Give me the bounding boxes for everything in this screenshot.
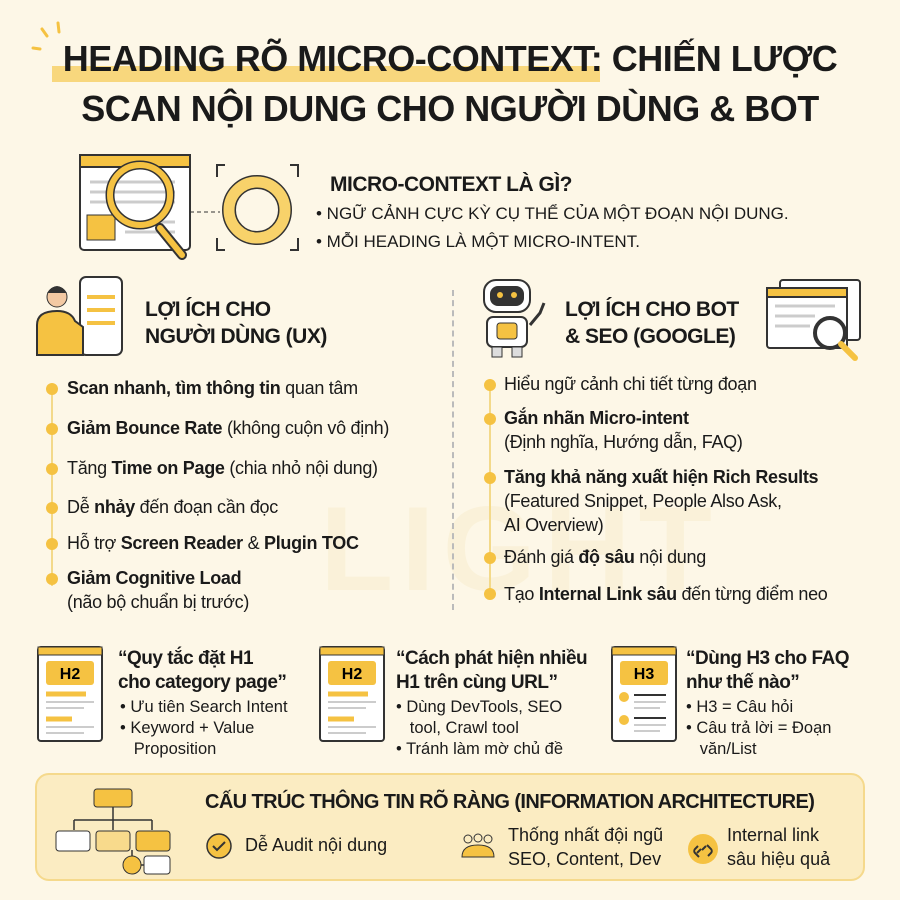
item: internal link: sâu hiệu quả (727, 849, 830, 869)
card: multiple H1: • Dùng DevTools, SEO (396, 698, 562, 716)
icon: browser magnifier (766, 279, 861, 361)
icon: H3 doc: H3 (634, 666, 654, 683)
section: micro-context: • MỖI HEADING LÀ MỘT MICRO-INTENT. (316, 232, 640, 251)
list: UX benefits: Tăng Time on Page (chia nhỏ nội dung) (67, 458, 378, 478)
section: micro-context: • NGỮ CẢNH CỰC KỲ CỤ THỂ CỦA MỘT ĐOẠN NỘI DUNG. (316, 204, 789, 223)
list: UX benefits: (não bộ chuẩn bị trước) (67, 592, 249, 612)
list: bot benefits: (Featured Snippet, People Also Ask, (504, 491, 782, 511)
list: UX benefits: Scan nhanh, tìm thông tin quan tâm (67, 378, 358, 398)
list: UX benefits: Giảm Cognitive Load (67, 568, 241, 588)
heading: bot: & SEO (GOOGLE) (565, 325, 735, 348)
icon: magnifier browser (79, 154, 299, 260)
title: HEADING RÕ MICRO-CONTEXT: CHIẾN LƯỢC (63, 38, 837, 79)
watermark: LIGHT (320, 482, 720, 616)
card: multiple H1: “Cách phát hiện nhiều (396, 648, 587, 669)
list: bot benefits: Gắn nhãn Micro-intent (504, 408, 689, 428)
icon: H2 doc (37, 646, 103, 742)
card: H1 category: Proposition (134, 740, 216, 758)
icon: sparkle (32, 22, 60, 50)
list: bot benefits: Hiểu ngữ cảnh chi tiết từng đoạn (504, 374, 757, 394)
card: H1 category (37, 646, 288, 758)
icon: person with phone (36, 276, 123, 356)
card: H3 FAQ: văn/List (700, 740, 757, 758)
heading: UX (145, 297, 327, 348)
card: H1 category: cho category page” (118, 672, 286, 693)
list: UX benefits: Dễ nhảy đến đoạn cần đọc (67, 497, 278, 517)
card: multiple H1: tool, Crawl tool (410, 719, 519, 737)
item: internal link: Internal link (727, 825, 819, 845)
card: H1 category: “Quy tắc đặt H1 (118, 648, 253, 669)
item: audit: Dễ Audit nội dung (245, 835, 387, 855)
title (52, 38, 837, 129)
panel: information architecture (35, 773, 865, 881)
item: internal link (688, 825, 830, 869)
list: UX benefits (46, 378, 389, 612)
item: team: Thống nhất đội ngũ (508, 825, 663, 845)
card: H3 FAQ: như thế nào” (686, 672, 799, 693)
icon: H3 doc (611, 646, 677, 742)
list: bot benefits: Tạo Internal Link sâu đến từng điểm neo (504, 584, 828, 604)
item: team: SEO, Content, Dev (508, 849, 661, 869)
list: bot benefits: Đánh giá độ sâu nội dung (504, 547, 706, 567)
card: H3 FAQ: • H3 = Câu hỏi (686, 698, 793, 716)
card: multiple H1: • Tránh làm mờ chủ đề (396, 740, 563, 758)
list: bot benefits: AI Overview) (504, 515, 603, 535)
list: UX benefits: Giảm Bounce Rate (không cuộn vô định) (67, 418, 389, 438)
list: UX benefits: Hỗ trợ Screen Reader & Plugin TOC (67, 533, 359, 553)
title: SCAN NỘI DUNG CHO NGƯỜI DÙNG & BOT (81, 88, 819, 129)
icon: robot (483, 279, 546, 358)
icon: H2 doc: H2 (60, 666, 80, 683)
heading: bot (565, 297, 739, 348)
icon: H2 doc (319, 646, 385, 742)
card: multiple H1 (319, 646, 587, 758)
card: H3 FAQ: “Dùng H3 cho FAQ (686, 648, 849, 669)
item: team (462, 825, 663, 869)
card: H3 FAQ: • Câu trả lời = Đoạn (686, 719, 831, 737)
list: bot benefits (484, 374, 828, 604)
card: multiple H1: H1 trên cùng URL” (396, 672, 557, 693)
icon: sitemap (56, 788, 170, 874)
heading: bot: LỢI ÍCH CHO BOT (565, 298, 739, 321)
section: micro-context (316, 172, 789, 251)
card: H1 category: • Ưu tiên Search Intent (120, 698, 288, 716)
panel: information architecture: CẤU TRÚC THÔNG TIN RÕ RÀNG (INFORMATION ARCHITECTURE) (205, 791, 814, 813)
card: H1 category: • Keyword + Value (120, 719, 254, 737)
heading: UX: NGƯỜI DÙNG (UX) (145, 325, 327, 348)
divider (452, 290, 454, 610)
list: bot benefits: (Định nghĩa, Hướng dẫn, FAQ) (504, 432, 743, 452)
list: bot benefits: Tăng khả năng xuất hiện Rich Results (504, 467, 818, 487)
item: audit (206, 833, 387, 859)
heading: UX: LỢI ÍCH CHO (145, 298, 271, 321)
icon: H2 doc: H2 (342, 666, 362, 683)
section: micro-context: MICRO-CONTEXT LÀ GÌ? (330, 173, 572, 196)
card: H3 FAQ (611, 646, 849, 758)
